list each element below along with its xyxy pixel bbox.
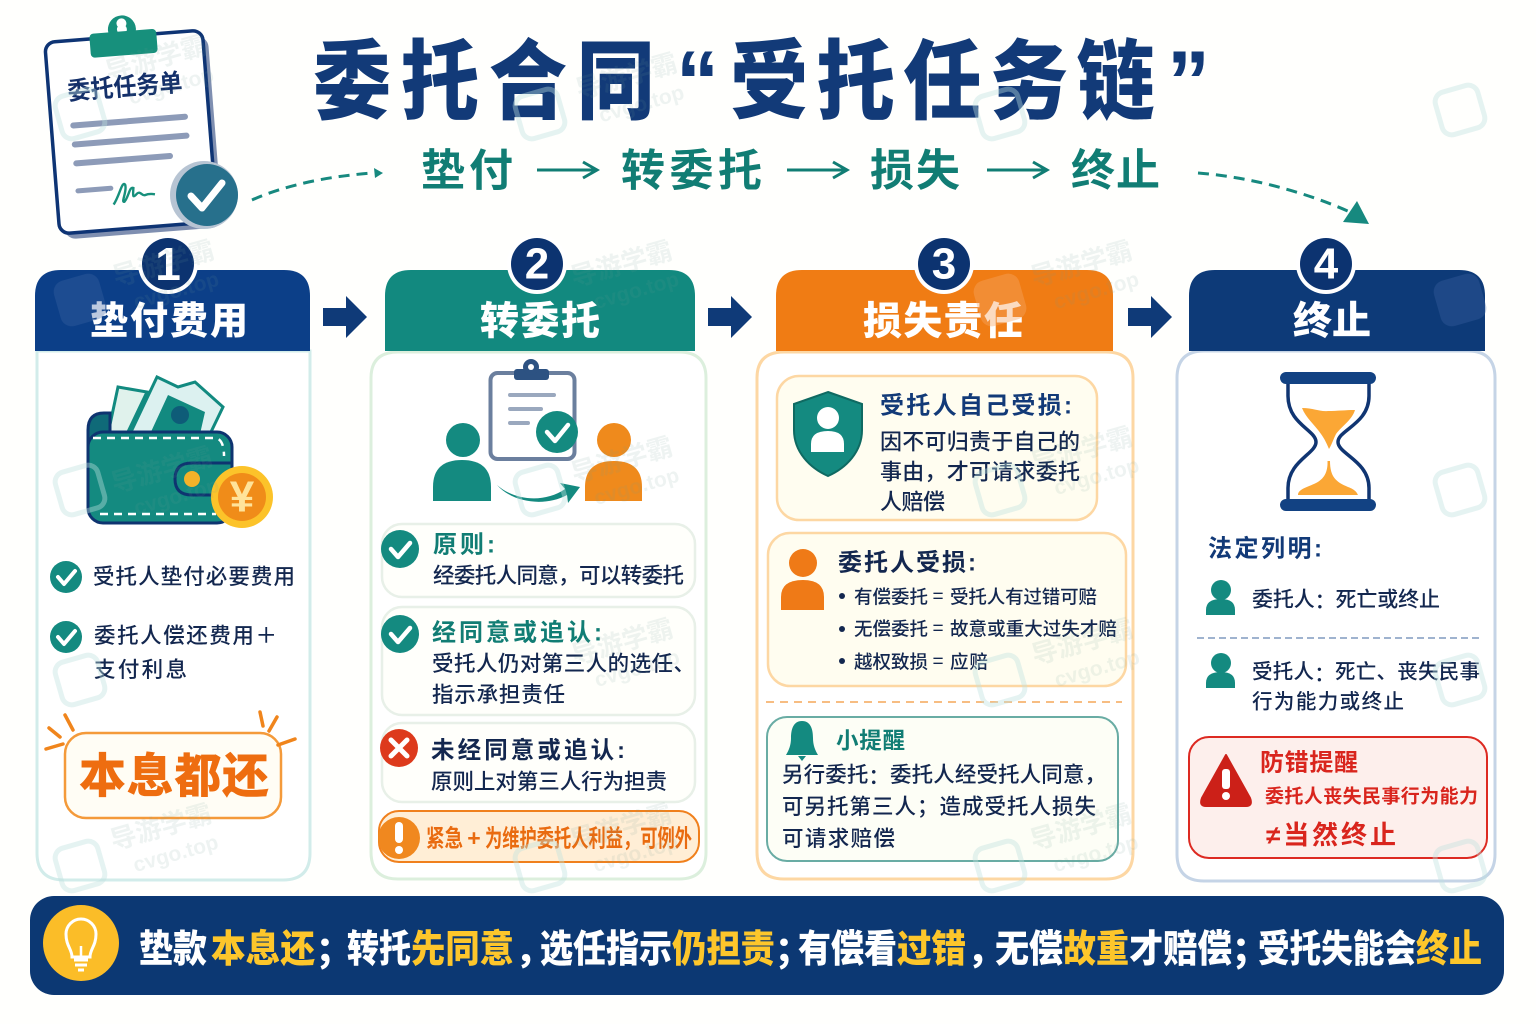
heading: statutory list: 法定列明:: [1208, 536, 1322, 562]
title: 委托合同: [313, 33, 655, 131]
watermarks: cvgo.top: [126, 63, 216, 109]
card: small reminder: 另行委托：委托人经受托人同意，: [782, 760, 1106, 790]
card: small reminder: 可请求赔偿: [782, 827, 895, 851]
header: step 2: 2: [525, 240, 549, 288]
card: delegatee's own loss: 受托人自己受损:: [880, 392, 1072, 420]
card: with consent: 受托人仍对第三人的选任、: [432, 652, 695, 676]
card: delegator's loss: 越权致损: [854, 652, 928, 672]
bullet: repay costs and interest: [50, 621, 277, 682]
header: step 4: 终止: [1293, 300, 1371, 344]
card: without consent: 原则上对第三人行为担责: [431, 770, 667, 794]
summary text: ；: [316, 930, 352, 970]
watermarks: 导游学霸: [1027, 235, 1136, 293]
header: step 4: [1189, 234, 1485, 351]
summary text: 才赔偿: [1129, 929, 1232, 971]
card: delegator's loss: 应赔: [950, 652, 988, 672]
header: step 1: 1: [155, 238, 181, 290]
summary text: 有偿看: [798, 929, 897, 971]
arrow: step 1 to 2: [323, 296, 367, 338]
callout: emergency exception: [378, 811, 699, 862]
subtitle: task chain: [421, 146, 1160, 196]
watermarks: cvgo.top: [1052, 646, 1142, 692]
watermarks: cvgo.top: [591, 268, 682, 314]
summary text: ，: [515, 930, 551, 970]
item: delegator ends: 委托人：死亡或终止: [1252, 585, 1440, 615]
icon: delegate transfer: [433, 359, 642, 503]
watermarks: 导游学霸: [102, 30, 210, 87]
card: delegatee's own loss: 事由，才可请求委托: [880, 460, 1080, 484]
watermarks: cvgo.top: [591, 831, 681, 877]
watermarks: 导游学霸: [108, 441, 216, 499]
summary text: 过错: [897, 929, 966, 971]
card: principle: 经委托人同意，可以转委托: [433, 564, 684, 588]
icon: shield person: [794, 392, 862, 476]
title: ”: [1167, 34, 1210, 130]
callout: emergency exception: 为维护委托人利益，可例外: [485, 826, 692, 852]
card: without consent: [380, 723, 695, 802]
title: 受托任务链: [730, 33, 1155, 131]
summary text: 先同意: [411, 928, 514, 971]
watermarks: cvgo.top: [1051, 831, 1141, 877]
watermarks: 导游学霸: [568, 431, 676, 489]
watermarks: 导游学霸: [1028, 421, 1136, 479]
watermarks: cvgo.top: [131, 831, 221, 877]
card: with consent: [381, 607, 695, 715]
icon: light bulb: [43, 905, 119, 981]
icon: bell: [786, 721, 818, 761]
panel: step 2 sub-delegation: [371, 234, 706, 879]
card: principle: [381, 524, 695, 597]
watermarks: 导游学霸: [1028, 613, 1137, 671]
bullet: advance necessary costs: 受托人垫付必要费用: [93, 565, 295, 589]
item: delegatee ends: [1206, 653, 1480, 714]
header: step 2: [385, 234, 695, 351]
watermarks: 导游学霸: [572, 47, 681, 105]
summary text: 无偿: [995, 929, 1063, 971]
panel: step 1 advance costs: [35, 234, 310, 880]
card: delegator's loss: 有偿委托: [854, 586, 928, 608]
watermarks: [53, 30, 1487, 893]
summary text: 垫款: [139, 929, 207, 971]
card: without consent: 未经同意或追认:: [431, 736, 625, 763]
watermarks: cvgo.top: [131, 474, 222, 520]
header: step 1: [35, 234, 310, 351]
item: delegatee ends: 行为能力或终止: [1252, 690, 1404, 714]
watermarks: 导游学霸: [567, 798, 675, 856]
watermarks: 导游学霸: [109, 235, 218, 292]
title: [313, 33, 1210, 131]
icon: clipboard task sheet: 委托任务单: [67, 69, 183, 106]
callout: emergency exception: 紧急: [426, 826, 463, 852]
watermarks: 导游学霸: [107, 798, 215, 856]
subtitle: task chain: 终止: [1071, 146, 1160, 196]
header: step 3: 损失责任: [863, 300, 1023, 344]
header: step 3: 3: [932, 240, 956, 288]
arrow: dashed left: [252, 168, 383, 200]
icon: clipboard task sheet: [43, 9, 238, 240]
watermarks: cvgo.top: [596, 81, 687, 127]
panel: step 3 loss liability: [757, 234, 1133, 879]
card: principle: 原则:: [433, 532, 495, 558]
title: “: [676, 34, 719, 130]
summary text: ；: [775, 930, 811, 970]
summary text: 仍担责: [672, 929, 775, 971]
arrow: dashed right: [1198, 173, 1369, 224]
header: step 3: [776, 234, 1113, 351]
bullet: repay costs and interest: 委托人偿还费用＋: [94, 624, 277, 648]
card: delegator's loss: =: [932, 618, 944, 640]
arrow: step 2 to 3: [708, 296, 752, 338]
card: delegator's loss: 受托人有过错可赔: [950, 586, 1097, 608]
callout: error warning: 委托人丧失民事行为能力: [1265, 786, 1478, 808]
callout: repay principal and interest: [46, 712, 295, 818]
card: delegator's loss: 无偿委托: [854, 618, 928, 640]
card: small reminder: [767, 717, 1118, 861]
subtitle: task chain: 垫付: [421, 146, 513, 196]
callout: error warning: ≠当然终止: [1266, 820, 1396, 850]
callout: emergency exception: +: [467, 825, 481, 851]
header: step 1: 垫付费用: [90, 301, 248, 343]
card: delegator's loss: =: [932, 652, 944, 672]
summary text: 终止: [1416, 929, 1482, 971]
arrow: step 3 to 4: [1128, 296, 1172, 338]
summary text: 本息还: [211, 929, 315, 971]
icon: wallet with yen coin: ¥: [230, 472, 255, 522]
card: delegator's loss: =: [932, 586, 944, 608]
subtitle: task chain: 损失: [870, 146, 960, 196]
summary text: 选任指示: [540, 929, 672, 971]
summary text: ，: [967, 930, 1003, 970]
watermarks: cvgo.top: [131, 268, 222, 314]
card: with consent: 指示承担责任: [432, 683, 565, 707]
watermarks: cvgo.top: [1051, 268, 1142, 314]
watermarks: 导游学霸: [567, 235, 676, 293]
summary text: ；: [1232, 930, 1268, 970]
panel: step 4 termination: [1177, 234, 1495, 881]
card: delegatee's own loss: [777, 376, 1097, 520]
callout: repay principal and interest: 本息都还: [79, 750, 269, 802]
header: step 2: 转委托: [480, 300, 600, 344]
watermarks: cvgo.top: [591, 464, 682, 510]
summary text: 故重: [1063, 929, 1129, 971]
item: delegator ends: [1206, 580, 1440, 615]
card: with consent: 经同意或追认:: [432, 618, 602, 646]
callout: error warning: 防错提醒: [1260, 750, 1358, 776]
summary text: [139, 928, 1482, 971]
watermarks: 导游学霸: [568, 613, 677, 671]
callout: error warning: [1189, 737, 1487, 858]
card: delegator's loss: 委托人受损:: [838, 550, 976, 576]
watermarks: cvgo.top: [592, 646, 682, 692]
item: delegatee ends: 受托人：死亡、丧失民事: [1252, 657, 1480, 687]
subtitle: task chain: 转委托: [621, 146, 762, 196]
header: step 4: 4: [1314, 240, 1339, 288]
icon: wallet with yen coin: [88, 377, 273, 528]
card: delegator's loss: 故意或重大过失才赔: [950, 618, 1117, 640]
summary bar: [30, 896, 1504, 995]
card: delegatee's own loss: 人赔偿: [880, 490, 945, 514]
watermarks: cvgo.top: [1051, 454, 1142, 500]
card: small reminder: 小提醒: [836, 728, 905, 754]
summary text: 受托失能会: [1258, 929, 1416, 971]
watermarks: 导游学霸: [1027, 798, 1135, 856]
card: delegatee's own loss: 因不可归责于自己的: [880, 430, 1080, 454]
icon: hourglass: [1280, 372, 1376, 511]
card: delegator's loss: [768, 533, 1126, 686]
bullet: advance necessary costs: [50, 561, 295, 593]
card: small reminder: 可另托第三人；造成受托人损失: [782, 795, 1096, 819]
summary text: 转托: [347, 929, 411, 971]
bullet: repay costs and interest: 支付利息: [94, 658, 187, 682]
